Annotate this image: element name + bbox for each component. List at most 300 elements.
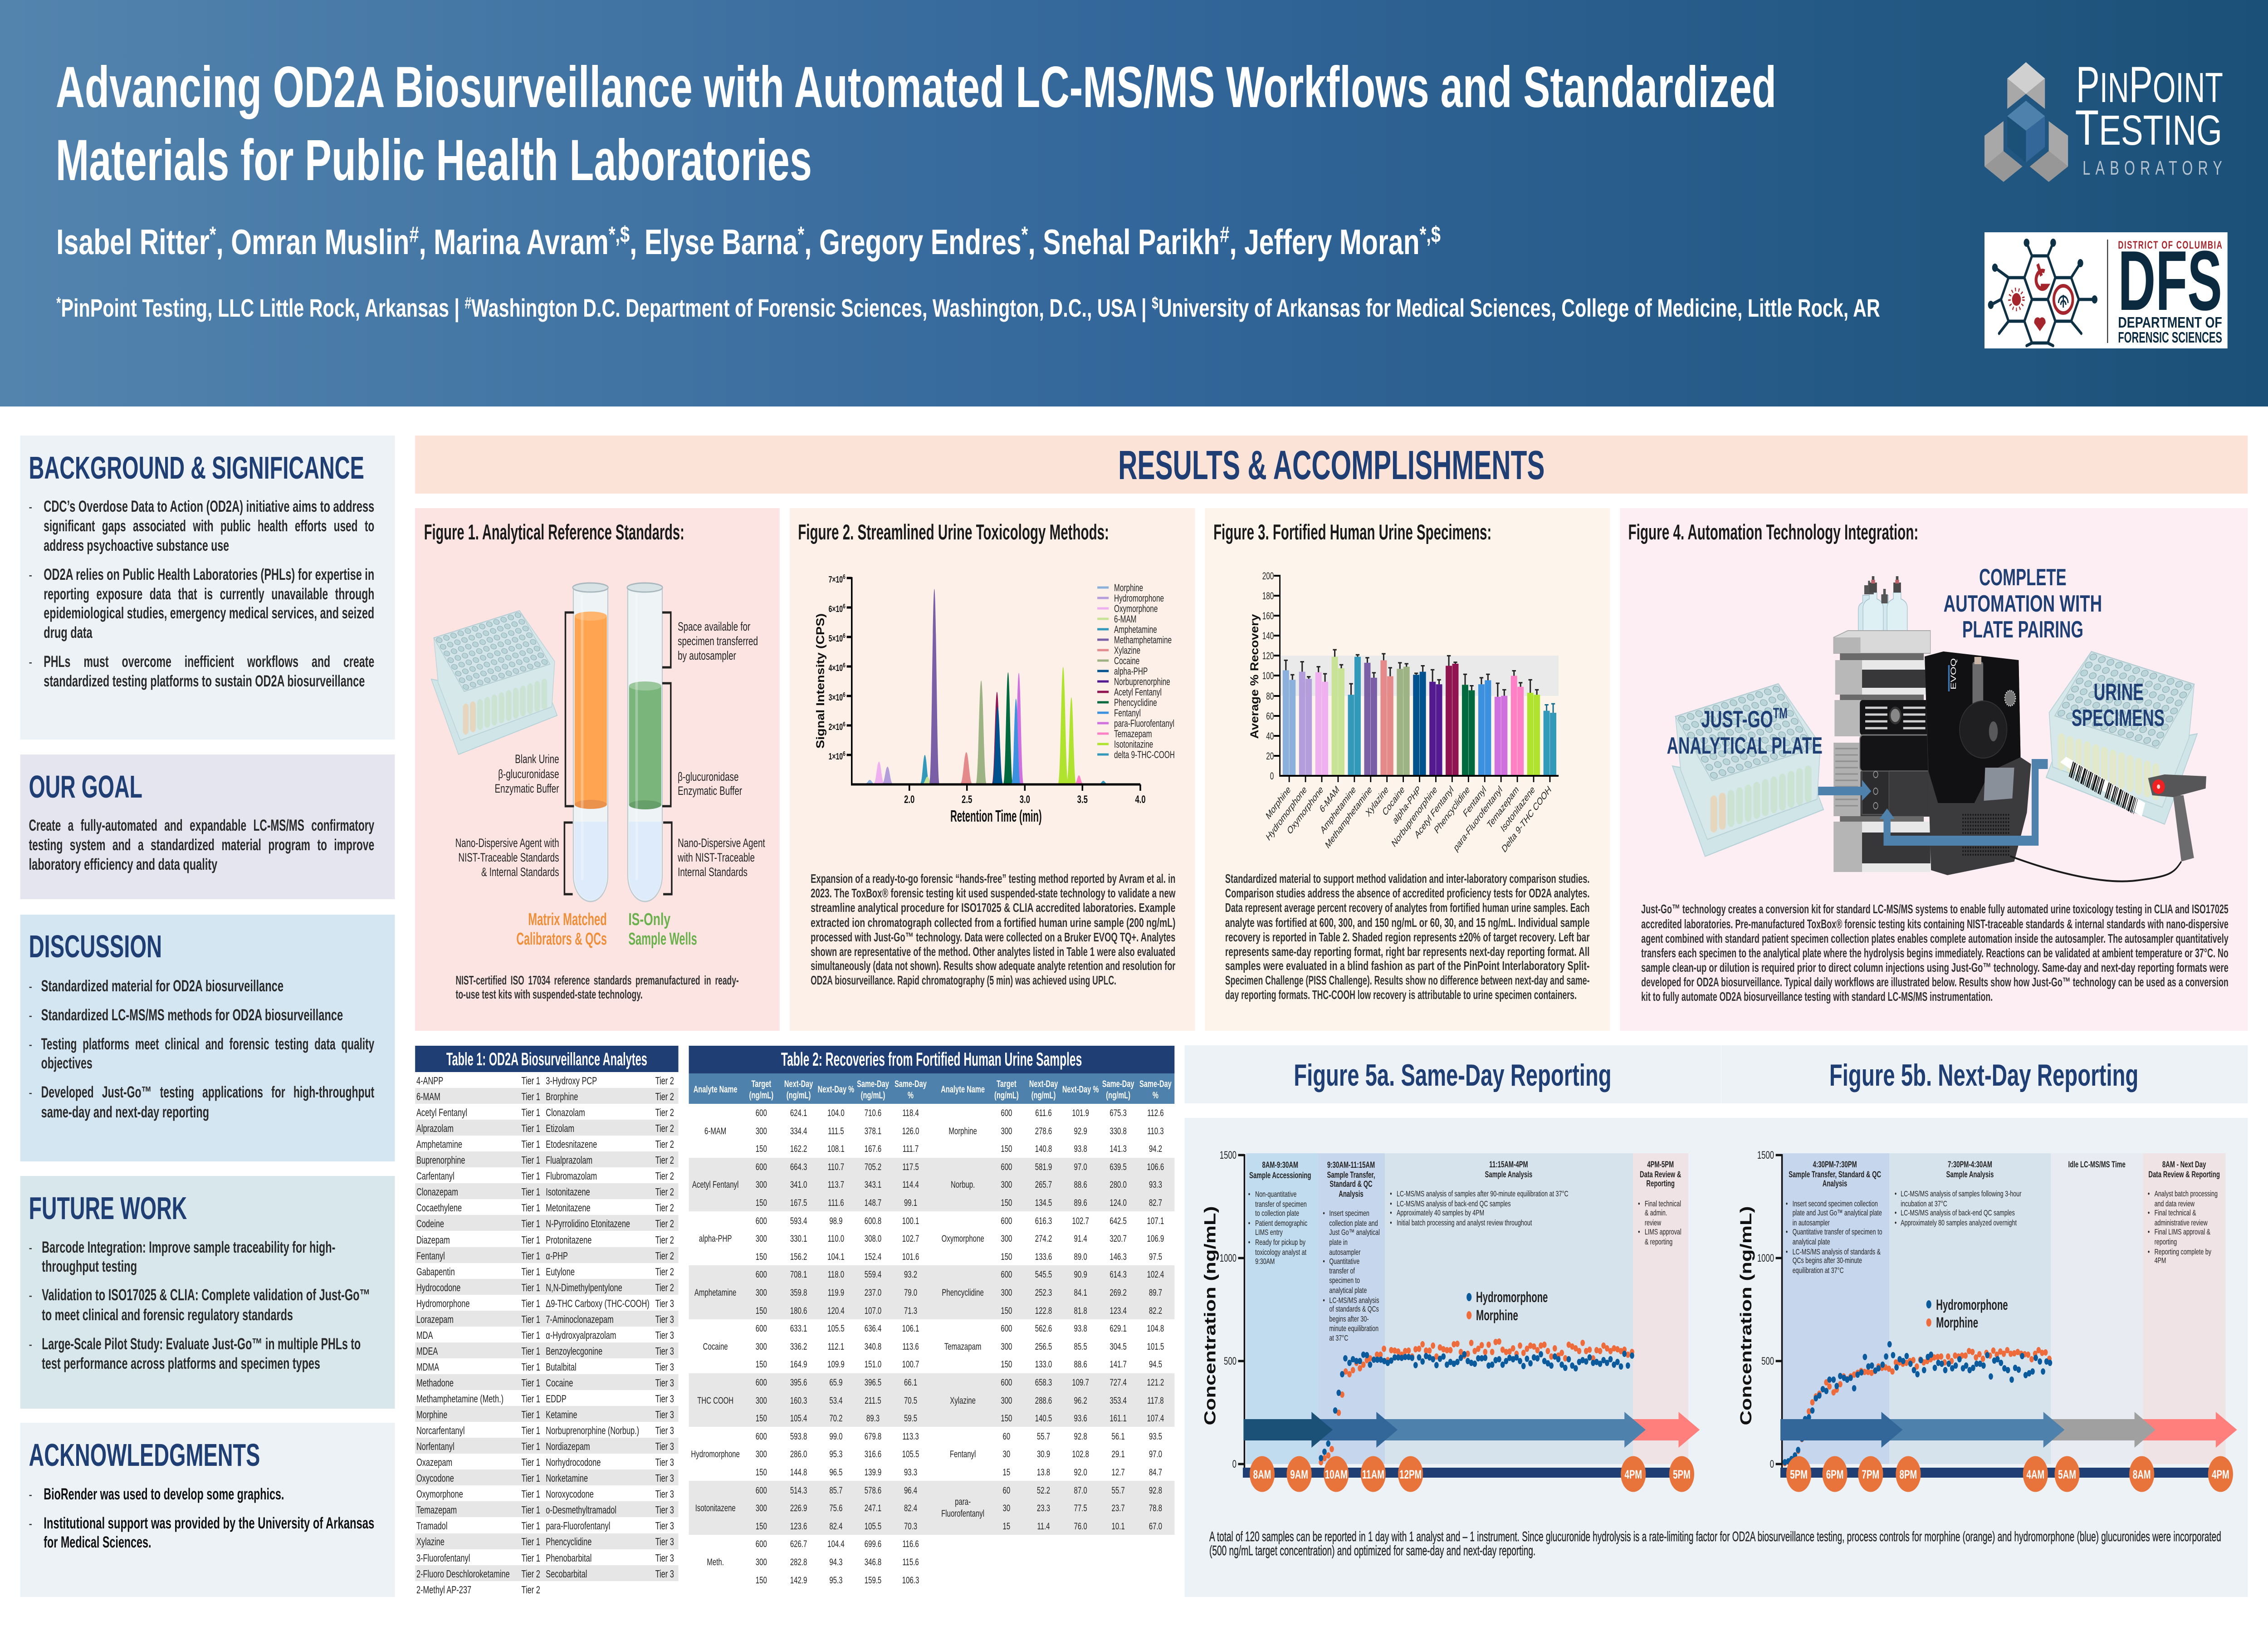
text block: future work bullets: Barcode Integration: Improve sample traceability for high- — [42, 1239, 335, 1256]
table 2 values: 113.6 — [902, 1341, 919, 1352]
table 1: OD2A biosurveillance analytes: Flualprazolam — [546, 1155, 592, 1166]
table 1: OD2A biosurveillance analytes: Tier 1 — [522, 1346, 540, 1357]
table 1: OD2A biosurveillance analytes: 3-Hydroxy PCP — [546, 1075, 597, 1087]
data points: morphine — [1321, 1342, 1632, 1462]
table 1: OD2A biosurveillance analytes: Tier 2 — [655, 1171, 674, 1182]
table 1: OD2A biosurveillance analytes: Oxazepam — [416, 1457, 452, 1469]
label: IS-only — [628, 909, 697, 948]
chart: chromatogram: Signal Intensity (CPS) — [814, 613, 827, 749]
table 2 values: 15 — [1003, 1520, 1010, 1532]
timeline bar and hours — [1243, 1456, 1694, 1492]
text: sample analysis: • — [1390, 1200, 1392, 1209]
table 1: OD2A biosurveillance analytes: Acetyl Fentanyl — [416, 1107, 467, 1119]
caption — [455, 974, 739, 1002]
table 2 values: 100.7 — [902, 1358, 919, 1370]
table 2 values: 89.7 — [1149, 1287, 1162, 1298]
table 2 values: 133.0 — [1035, 1358, 1052, 1370]
chart: average percent recovery bars: Hydromorphone — [1265, 784, 1308, 843]
table 2 column headers: (ng/mL) — [749, 1090, 773, 1101]
table 2 values: 578.6 — [865, 1484, 881, 1496]
figure 4 title: Figure 4. Automation Technology Integration: — [1628, 520, 1918, 544]
table 2 values: 167.6 — [865, 1143, 881, 1154]
figure 2 description: 2023. The ToxBox® forensic testing kit used suspended-state technology to validate a new — [811, 886, 1176, 901]
text block: discussion bullets: Standardized LC-MS/MS methods for OD2A biosurveillance — [41, 1007, 343, 1024]
text: sample transfer: at 37°C — [1329, 1334, 1348, 1343]
chart: figure 5b next-day timeline: 1500 — [1757, 1149, 1774, 1161]
legend: Hydromorphone — [1476, 1289, 1548, 1305]
text block: goal statement: laboratory efficiency and data quality — [29, 856, 217, 873]
table 2 values: 159.5 — [865, 1574, 881, 1586]
text: sample transfer: Standard & QC — [1330, 1180, 1373, 1189]
panel: future work — [20, 1176, 395, 1409]
chart: average percent recovery bars: 200 — [1262, 571, 1274, 582]
text: data review: & admin. — [1645, 1209, 1667, 1218]
table 1: OD2A biosurveillance analytes: Tier 2 — [655, 1186, 674, 1198]
table 2 values: 304.5 — [1110, 1341, 1127, 1352]
icon: cable — [2010, 856, 2181, 882]
chart: chromatogram: 6 — [843, 573, 846, 580]
table 1: OD2A biosurveillance analytes: Tier 3 — [655, 1330, 674, 1342]
table 2 values: 104.4 — [827, 1538, 845, 1549]
table 1: OD2A biosurveillance analytes: Tier 3 — [655, 1504, 674, 1516]
table 2 values: 75.6 — [829, 1502, 842, 1513]
figure 4 description: sample clean-up or dilution is required prior to direct column injections using Just-Go™ technology. Same-day and next-day reporting formats were — [1641, 961, 2229, 975]
panel: figure 1 — [415, 508, 780, 1031]
table 2 values: 600 — [1001, 1161, 1012, 1172]
chart legend: Phencyclidine — [1114, 697, 1157, 709]
table 2 values: 90.9 — [1074, 1268, 1087, 1280]
table 2 values: 123.6 — [790, 1520, 807, 1532]
table 2 values: 600 — [1001, 1215, 1012, 1226]
table 2 values: 70.5 — [904, 1395, 917, 1406]
text: sample accessioning: toxicology analyst at — [1255, 1248, 1307, 1257]
timeline bar and hours — [1780, 1456, 2233, 1492]
table 2 values: 134.5 — [1035, 1197, 1052, 1208]
text: sample transfer: • — [1323, 1257, 1325, 1266]
table 2 values: 30 — [1003, 1448, 1010, 1459]
table 2 values: 111.6 — [828, 1197, 844, 1208]
labels: left of tubes: Enzymatic Buffer — [495, 782, 559, 795]
table 2 values: 142.9 — [790, 1574, 807, 1586]
label: complete automation: COMPLETE — [1979, 563, 2067, 591]
table 2 values: 150 — [756, 1197, 767, 1208]
text: sample analysis: Initial batch processing and analyst review throughout — [1397, 1219, 1532, 1228]
text: sample analysis: • — [1895, 1219, 1897, 1228]
table 1: OD2A biosurveillance analytes: Norketamine — [546, 1473, 588, 1484]
text block: background bullets: OD2A relies on Public Health Laboratories (PHLs) for expertise in — [44, 566, 374, 583]
tube: matrix matched calibrators — [573, 583, 608, 901]
table 1: OD2A biosurveillance analytes: Tier 1 — [522, 1473, 540, 1484]
table 2 values: 107.0 — [865, 1305, 881, 1316]
table 2 values: 600 — [756, 1430, 767, 1442]
table 2 values: 123.4 — [1110, 1305, 1127, 1316]
table 1: OD2A biosurveillance analytes: α-Hydroxyalprazolam — [546, 1330, 616, 1342]
table 2 values: 150 — [756, 1574, 767, 1586]
table 2 values: 97.0 — [1149, 1448, 1162, 1459]
text: sample transfer: QCs begins after 30-minute — [1793, 1256, 1862, 1265]
icon: mass spectrometer: EVOQ — [1950, 658, 1958, 690]
chart: average percent recovery bars: Isotonitazene — [1499, 784, 1536, 834]
table 2 values: 600.8 — [865, 1215, 881, 1226]
arrows: workflow phases — [1243, 1412, 1700, 1448]
table 1: OD2A biosurveillance analytes: Tier 1 — [522, 1202, 540, 1214]
table 2 values: 300 — [756, 1556, 767, 1567]
table 2 values: 144.8 — [790, 1466, 807, 1478]
table 2 values: 161.1 — [1110, 1412, 1127, 1424]
table 1: OD2A biosurveillance analytes: Tier 1 — [522, 1314, 540, 1326]
title — [56, 55, 1776, 193]
text block: background bullets: - — [29, 654, 32, 670]
table 2 values: 81.8 — [1074, 1305, 1087, 1316]
table 2 values: 710.6 — [865, 1107, 881, 1118]
table 2 values: 70.3 — [904, 1520, 917, 1532]
table 2 values: 88.6 — [1074, 1179, 1087, 1190]
table 2 values: 113.3 — [902, 1430, 919, 1442]
chart legend: Norbuprenorphine — [1114, 676, 1170, 688]
table 2 column headers: (ng/mL) — [861, 1090, 885, 1101]
table 1: OD2A biosurveillance analytes: Butalbital — [546, 1362, 577, 1373]
table 2 column headers: Next-Day % — [818, 1084, 854, 1095]
text block: future work bullets — [29, 1239, 370, 1372]
table 1: OD2A biosurveillance analytes: Oxycodone — [416, 1473, 454, 1484]
figure 3 description: Data represent average percent recovery of analytes from fortified human urine samples. Each — [1225, 901, 1589, 915]
table 2 values: 30 — [1003, 1502, 1010, 1513]
text: sample analysis: • — [1390, 1219, 1392, 1228]
text: sample accessioning: transfer of specimen — [1255, 1200, 1307, 1209]
chart: chromatogram: 5×10 — [829, 633, 843, 644]
timeline bar and hours: 8AM — [2133, 1468, 2151, 1481]
title: Advancing OD2A Biosurveillance with Automated LC-MS/MS Workflows and Standardized — [56, 55, 1776, 120]
text block: future work bullets: - — [29, 1287, 32, 1303]
text block: goal statement: testing system and a standardized material program to improve — [29, 837, 374, 854]
panel: background and significance — [20, 436, 395, 740]
figure 3 description: represents same-day reporting format, right bar represents next-day reporting format. All — [1225, 945, 1589, 959]
table 2 values: 117.5 — [902, 1161, 919, 1172]
table 2 values: 708.1 — [790, 1268, 807, 1280]
affiliations: $ — [1152, 294, 1158, 312]
table 2 values: 66.1 — [904, 1376, 917, 1388]
authors: * — [210, 222, 216, 248]
table 2 column headers: Next-Day % — [1062, 1084, 1099, 1095]
label: urine specimens — [2072, 678, 2165, 731]
chart: figure 5b next-day timeline: Concentration (ng/mL) — [1737, 1206, 1755, 1425]
table 2 values: 98.9 — [829, 1215, 842, 1226]
table 2 values: 396.5 — [865, 1376, 881, 1388]
table 1: OD2A biosurveillance analytes: Codeine — [416, 1218, 444, 1230]
table 2 values: 95.3 — [829, 1574, 842, 1586]
labels: left of tubes — [455, 752, 559, 879]
text: data review: administrative review — [2155, 1219, 2208, 1228]
text block: acknowledgments bullets: Institutional support was provided by the University of Arkansas — [44, 1515, 374, 1532]
affiliations: Washington D.C. Department of Forensic Sciences, Washington, D.C., USA | — [471, 294, 1152, 323]
text block: future work bullets: Large-Scale Pilot Study: Evaluate Just-Go™ in multiple PHLs to — [42, 1336, 361, 1353]
table 2 values: 120.4 — [827, 1305, 845, 1316]
table 2 values: 116.6 — [902, 1538, 919, 1549]
table 2 values: 164.9 — [790, 1358, 807, 1370]
table 1: OD2A biosurveillance analytes: Tier 3 — [655, 1568, 674, 1580]
label: matrix matched — [516, 909, 607, 948]
text block: acknowledgments bullets: - — [29, 1515, 32, 1532]
table 2 values: 110.0 — [828, 1233, 844, 1244]
table 1: OD2A biosurveillance analytes: Tier 3 — [655, 1314, 674, 1326]
chart: average percent recovery bars: Temazepam — [1486, 784, 1520, 831]
table 1: OD2A biosurveillance analytes: Norcarfentanyl — [416, 1425, 465, 1437]
table 2 values: 300 — [756, 1502, 767, 1513]
chart: chromatogram: 6 — [843, 632, 846, 639]
table 2 values: 639.5 — [1110, 1161, 1127, 1172]
table 1: OD2A biosurveillance analytes: Methamphetamine (Meth.) — [416, 1393, 503, 1405]
chart: average percent recovery bars: 100 — [1262, 671, 1274, 682]
table 2 values: 308.0 — [865, 1233, 881, 1244]
chart: average percent recovery bars: Amphetamine — [1319, 784, 1357, 836]
text: sample accessioning: Ready for pickup by — [1255, 1238, 1305, 1247]
table 2 values: 93.3 — [1149, 1179, 1162, 1190]
table 1: OD2A biosurveillance analytes: Tier 3 — [655, 1409, 674, 1421]
icon: urine specimen plate — [2046, 651, 2197, 824]
figure 3 description: Standardized material to support method validation and inter-laboratory comparison studies. — [1225, 872, 1589, 886]
table 2 values: 320.7 — [1110, 1233, 1127, 1244]
text block: background bullets: drug data — [44, 624, 93, 642]
table 2 values: 102.8 — [1072, 1448, 1089, 1459]
figure 2 description: extracted ion chromatograph collected from a fortified human urine sample (200 ng/mL) — [811, 916, 1175, 930]
table 2 values: 67.0 — [1149, 1520, 1162, 1532]
table 2 values: 105.4 — [790, 1412, 807, 1424]
chart: average percent recovery bars: 180 — [1262, 591, 1274, 602]
table 2 values: 300 — [1001, 1233, 1012, 1244]
logo: PinPoint Testing Laboratory: PINPOINT — [2076, 57, 2223, 113]
table 1: OD2A biosurveillance analytes: Noroxycodone — [546, 1489, 594, 1500]
table 2 values: 600 — [756, 1107, 767, 1118]
table 2 values: 152.4 — [865, 1251, 881, 1262]
table 2 values: 658.3 — [1035, 1376, 1052, 1388]
text block: future work bullets: throughput testing — [42, 1258, 137, 1275]
table 1: OD2A biosurveillance analytes: Tier 2 — [655, 1202, 674, 1214]
table 2 values: 300 — [756, 1395, 767, 1406]
figure 3 description: Specimen Challenge (PISS Challenge). Results show no difference between next-day and same- — [1225, 974, 1589, 988]
table 1: OD2A biosurveillance analytes: Tier 3 — [655, 1377, 674, 1389]
table 2 values: 122.8 — [1035, 1305, 1052, 1316]
table 2 values: 600 — [1001, 1376, 1012, 1388]
label: IS-only: IS-Only — [628, 909, 671, 929]
text: sample transfer: specimen to — [1329, 1276, 1360, 1285]
chart: chromatogram — [814, 573, 1175, 825]
figure 5 caption — [1209, 1528, 2221, 1558]
table 2 values: 104.1 — [827, 1251, 845, 1262]
chart legend: Cocaine — [1114, 656, 1139, 667]
table 1: OD2A biosurveillance analytes: Tier 1 — [522, 1234, 540, 1246]
table 2 values: 600 — [756, 1215, 767, 1226]
table 1: OD2A biosurveillance analytes: Morphine — [416, 1409, 447, 1421]
table 2 values: 53.4 — [829, 1395, 842, 1406]
table 2 column headers: Analyte Name — [941, 1084, 985, 1095]
table 1: OD2A biosurveillance analytes: Tier 1 — [522, 1504, 540, 1516]
table 2 values: 76.0 — [1074, 1520, 1087, 1532]
chart legend — [1097, 583, 1175, 761]
text: sample analysis: Sample Analysis — [1946, 1170, 1994, 1180]
table 2: recoveries from fortified human urine samples — [689, 1046, 1174, 1586]
labels: left of tubes: & Internal Standards — [481, 865, 559, 879]
table 1: OD2A biosurveillance analytes: Cocaethylene — [416, 1202, 462, 1214]
table 1: OD2A biosurveillance analytes: Tier 2 — [655, 1123, 674, 1135]
label: matrix matched: Matrix Matched — [528, 909, 607, 929]
data points: hydromorphone — [1785, 1344, 2050, 1462]
table 2 analyte names: THC COOH — [697, 1395, 733, 1406]
text: sample transfer: autosampler — [1329, 1248, 1360, 1257]
chart: chromatogram: 6 — [843, 602, 846, 610]
data points: hydromorphone — [1321, 1354, 1632, 1458]
table 1: OD2A biosurveillance analytes: Tier 1 — [522, 1536, 540, 1548]
chart legend: para-Fluorofentanyl — [1114, 718, 1174, 730]
chart: chromatogram: 2.0 — [904, 793, 914, 806]
table 2 values: 89.0 — [1074, 1251, 1087, 1262]
table 2 values: 226.9 — [790, 1502, 807, 1513]
table 2 values: 160.3 — [790, 1395, 807, 1406]
text: sample transfer: transfer of — [1329, 1267, 1355, 1276]
text: sample transfer: analytical plate — [1329, 1286, 1367, 1295]
table 2 values: 85.7 — [829, 1484, 842, 1496]
table 1: OD2A biosurveillance analytes: Hydromorphone — [416, 1298, 469, 1310]
table 2 values: 600 — [1001, 1322, 1012, 1334]
table 2 values: 150 — [756, 1251, 767, 1262]
table 1: OD2A biosurveillance analytes: Carfentanyl — [416, 1171, 455, 1182]
chart: chromatogram: Retention Time (min) — [950, 807, 1042, 825]
table 1: OD2A biosurveillance analytes: Tier 1 — [522, 1377, 540, 1389]
heading: discussion: DISCUSSION — [29, 928, 162, 964]
chart: chromatogram: 6 — [843, 661, 846, 669]
table 2 analyte names: Temazapam — [944, 1341, 981, 1352]
authors: *,$ — [609, 222, 630, 248]
table 2 column headers — [694, 1078, 1172, 1101]
timeline bar and hours: 8PM — [1900, 1468, 1917, 1481]
table 1: OD2A biosurveillance analytes: Tier 1 — [522, 1457, 540, 1469]
labels: right of tubes: specimen transferred — [678, 634, 758, 648]
panel: results heading: RESULTS & ACCOMPLISHMENTS — [1118, 443, 1545, 488]
table 2 values: 282.8 — [790, 1556, 807, 1567]
table 1: OD2A biosurveillance analytes: 2-Fluoro Deschloroketamine — [416, 1568, 510, 1580]
text block: acknowledgments bullets: for Medical Sciences. — [44, 1534, 151, 1551]
table 2 values: 133.6 — [1035, 1251, 1052, 1262]
table 2 values: 139.9 — [865, 1466, 881, 1478]
table 1: OD2A biosurveillance analytes: Tier 2 — [655, 1234, 674, 1246]
affiliations: * — [56, 294, 61, 312]
table 1: OD2A biosurveillance analytes: Nordiazepam — [546, 1441, 590, 1453]
text: data review: reporting — [2155, 1238, 2177, 1247]
table 2 values: 300 — [1001, 1287, 1012, 1298]
authors: *,$ — [1420, 222, 1441, 248]
table 1: OD2A biosurveillance analytes: Methadone — [416, 1377, 454, 1389]
table 2 column headers: % — [908, 1090, 914, 1101]
chart: average percent recovery bars: 6-MAM — [1318, 784, 1341, 815]
table 2 values: 109.7 — [1072, 1376, 1089, 1388]
table 2 values: 593.4 — [790, 1215, 807, 1226]
table 2 values: 600 — [756, 1376, 767, 1388]
text: sample analysis: • — [1895, 1209, 1897, 1218]
table 2 values: 300 — [1001, 1395, 1012, 1406]
chart: average percent recovery bars: Phencyclidine — [1433, 784, 1471, 836]
table 2 values: 52.2 — [1037, 1484, 1050, 1496]
text block: goal statement — [29, 817, 374, 873]
table 2 values: 108.1 — [827, 1143, 845, 1154]
text: sample analysis: LC-MS/MS analysis of back-end QC samples — [1901, 1209, 2015, 1218]
timeline bar and hours: 7PM — [1862, 1468, 1879, 1481]
table 1: OD2A biosurveillance analytes: Hydrocodone — [416, 1282, 460, 1294]
table 2 column headers: Next-Day — [784, 1078, 813, 1089]
table 2 values: 300 — [756, 1179, 767, 1190]
table 2 values: 626.7 — [790, 1538, 807, 1549]
figure 1 title: Figure 1. Analytical Reference Standards: — [424, 520, 684, 544]
labels: left of tubes: β-glucuronidase — [498, 767, 559, 781]
text: data review: • — [1638, 1228, 1640, 1237]
text: sample analysis: LC-MS/MS analysis of samples following 3-hour — [1901, 1190, 2021, 1199]
chart: figure 5a same-day timeline: 0 — [1232, 1458, 1237, 1470]
table 2 values: 353.4 — [1110, 1395, 1127, 1406]
table 1: OD2A biosurveillance analytes: Tier 3 — [655, 1553, 674, 1564]
table 1: OD2A biosurveillance analytes — [415, 1046, 679, 1596]
table 2 analyte names: Morphine — [948, 1125, 977, 1136]
text block: acknowledgments bullets — [29, 1486, 374, 1551]
figure 3 description — [1225, 872, 1590, 1002]
table 2 values: 82.7 — [1149, 1197, 1162, 1208]
legend — [1466, 1289, 1548, 1323]
chart legend: Amphetamine — [1114, 624, 1157, 636]
text block: future work bullets: Validation to ISO17025 & CLIA: Complete validation of Just-Go™ — [42, 1287, 370, 1304]
chart: chromatogram: 2×10 — [829, 721, 843, 732]
logo: PinPoint Testing Laboratory — [1984, 57, 2223, 182]
authors: , Jeffery Moran — [1229, 222, 1420, 262]
table 2 values: 55.7 — [1037, 1430, 1050, 1442]
text: sample accessioning: to collection plate — [1255, 1209, 1299, 1218]
chart: average percent recovery bars: 60 — [1266, 711, 1274, 722]
figure 3 description: samples were evaluated in a blind fashion as part of the PinPoint Interlaboratory Split- — [1225, 959, 1589, 973]
chart: figure 5b next-day timeline: 1000 — [1757, 1252, 1774, 1264]
panel: results heading — [415, 436, 2248, 494]
panel: figure 5 charts background — [1185, 1118, 2248, 1597]
table 2 column headers: Target — [751, 1078, 771, 1089]
table 1: OD2A biosurveillance analytes: MDEA — [416, 1346, 438, 1357]
authors: * — [1022, 222, 1028, 248]
authors: , Gregory Endres — [804, 222, 1022, 262]
table 2 values: 288.6 — [1035, 1395, 1052, 1406]
table 2 values: 113.7 — [828, 1179, 844, 1190]
logo: DC Department of Forensic Sciences: FORENSIC SCIENCES — [2118, 329, 2222, 346]
table 2 values: 110.7 — [828, 1161, 844, 1172]
table 1: OD2A biosurveillance analytes: Xylazine — [416, 1536, 445, 1548]
table 2 values: 514.3 — [790, 1484, 807, 1496]
table 2 values: 336.2 — [790, 1341, 807, 1352]
chart legend: Isotonitazine — [1114, 739, 1153, 750]
table 2 values: 346.8 — [865, 1556, 881, 1567]
panel: figure 5b heading — [1721, 1045, 2248, 1103]
table 2 column headers: Analyte Name — [694, 1084, 738, 1095]
table 2 values: 330.1 — [790, 1233, 807, 1244]
table 1: OD2A biosurveillance analytes: Etizolam — [546, 1123, 574, 1135]
table 2 values: 559.4 — [865, 1268, 881, 1280]
table 1: OD2A biosurveillance analytes: Tier 2 — [655, 1155, 674, 1166]
table 2 column headers: Same-Day — [857, 1078, 889, 1089]
labels: left of tubes: NIST-Traceable Standards — [458, 851, 559, 864]
table 2 analyte names: alpha-PHP — [699, 1233, 732, 1244]
legend: Morphine — [1476, 1307, 1518, 1323]
table 1: OD2A biosurveillance analytes: Temazepam — [416, 1504, 457, 1516]
caption: to-use test kits with suspended-state technology. — [455, 988, 643, 1002]
table 2 values: 286.0 — [790, 1448, 807, 1459]
table 2 values: 340.8 — [865, 1341, 881, 1352]
table 1: OD2A biosurveillance analytes: Tier 1 — [522, 1409, 540, 1421]
labels: left of tubes: Nano-Dispersive Agent with — [455, 836, 559, 850]
table 2 analyte names: para- — [955, 1496, 971, 1507]
table 1: OD2A biosurveillance analytes: Tier 1 — [522, 1139, 540, 1151]
table 2 values: 300 — [756, 1125, 767, 1136]
